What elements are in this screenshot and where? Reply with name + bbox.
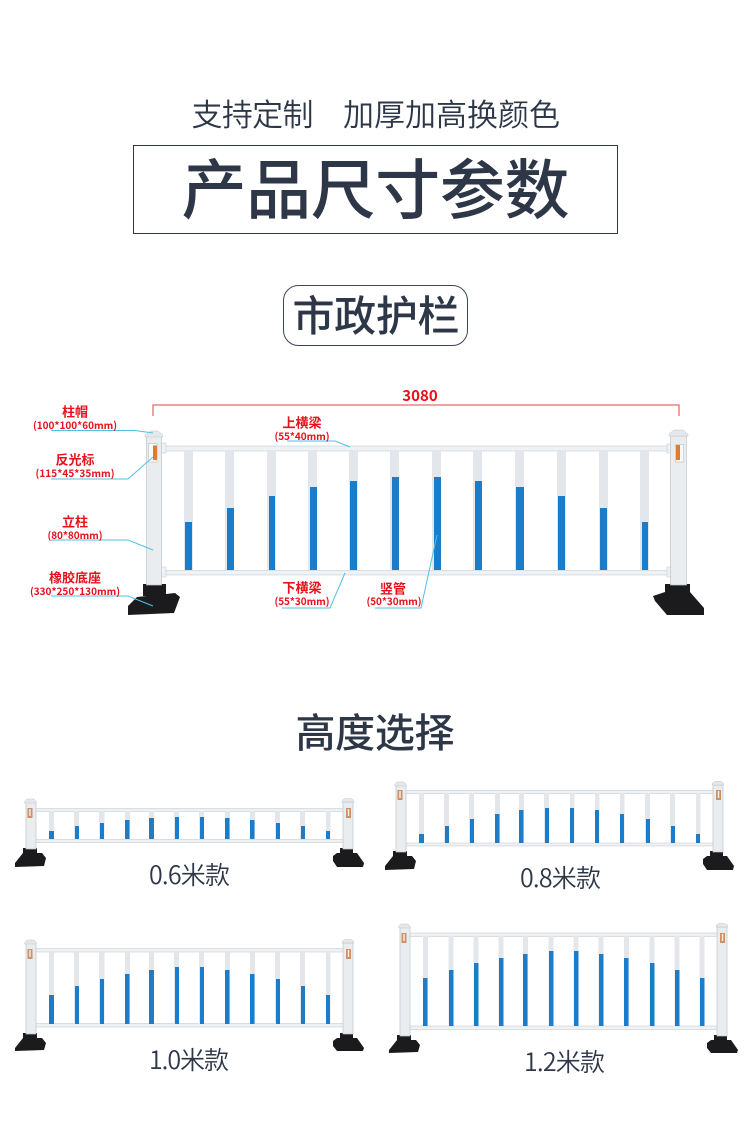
vertical bars: [184, 451, 649, 570]
label: post cap: (100*100*60mm): [33, 417, 117, 432]
label: vertical tube: [366, 578, 422, 608]
label: reflector: (115*45*35mm): [36, 465, 114, 480]
title box: 产品尺寸参数: [182, 138, 570, 232]
label: vertical tube: 竖管: [380, 578, 406, 598]
label: upright post: (80*80mm): [48, 527, 102, 542]
label: rubber base: (330*250*130mm): [30, 583, 120, 598]
fence: 1.0 m: [15, 940, 364, 1051]
subtitle: 支持定制: [192, 90, 314, 135]
dimension line: 3080: [153, 385, 679, 416]
label: post cap: [33, 402, 117, 432]
label: top rail: [274, 412, 330, 443]
fence: 0.8 m: [385, 782, 734, 870]
label: upright post: 立柱: [62, 512, 88, 530]
rails: [160, 443, 672, 577]
label: top rail: 上横梁: [282, 412, 322, 432]
subtitle: 加厚加高换颜色: [343, 90, 560, 135]
fence: 0.6 m: [15, 798, 364, 867]
label: 0.6 m: 0.6米款: [149, 856, 230, 892]
label: bottom rail: 下横梁: [282, 578, 322, 596]
main fence diagram: [30, 385, 704, 615]
label: 1.0 m: 1.0米款: [149, 1041, 229, 1077]
label: rubber base: 橡胶底座: [49, 568, 101, 586]
subtitle: [192, 90, 560, 135]
label: 0.8 m: 0.8米款: [520, 859, 601, 895]
label: post cap: 柱帽: [62, 402, 88, 420]
label: rubber base: [30, 568, 120, 598]
label: bottom rail: [274, 578, 330, 608]
fence: 1.2 m: [389, 924, 738, 1053]
heading: municipal guardrail: 市政护栏: [292, 283, 460, 344]
heading: height selection: 高度选择: [296, 701, 454, 759]
label: top rail: (55*40mm): [274, 428, 330, 443]
right post: [653, 430, 704, 615]
label: 1.2 m: 1.2米款: [524, 1043, 605, 1079]
label: vertical tube: (50*30mm): [366, 593, 422, 608]
label: reflector: [36, 450, 114, 480]
label: reflector: 反光标: [55, 450, 95, 468]
label: upright post: [48, 512, 102, 542]
leader lines: [51, 430, 437, 608]
left post: [128, 431, 180, 615]
dimension line: 3080: 3080: [402, 385, 438, 406]
label: bottom rail: (55*30mm): [274, 593, 330, 608]
